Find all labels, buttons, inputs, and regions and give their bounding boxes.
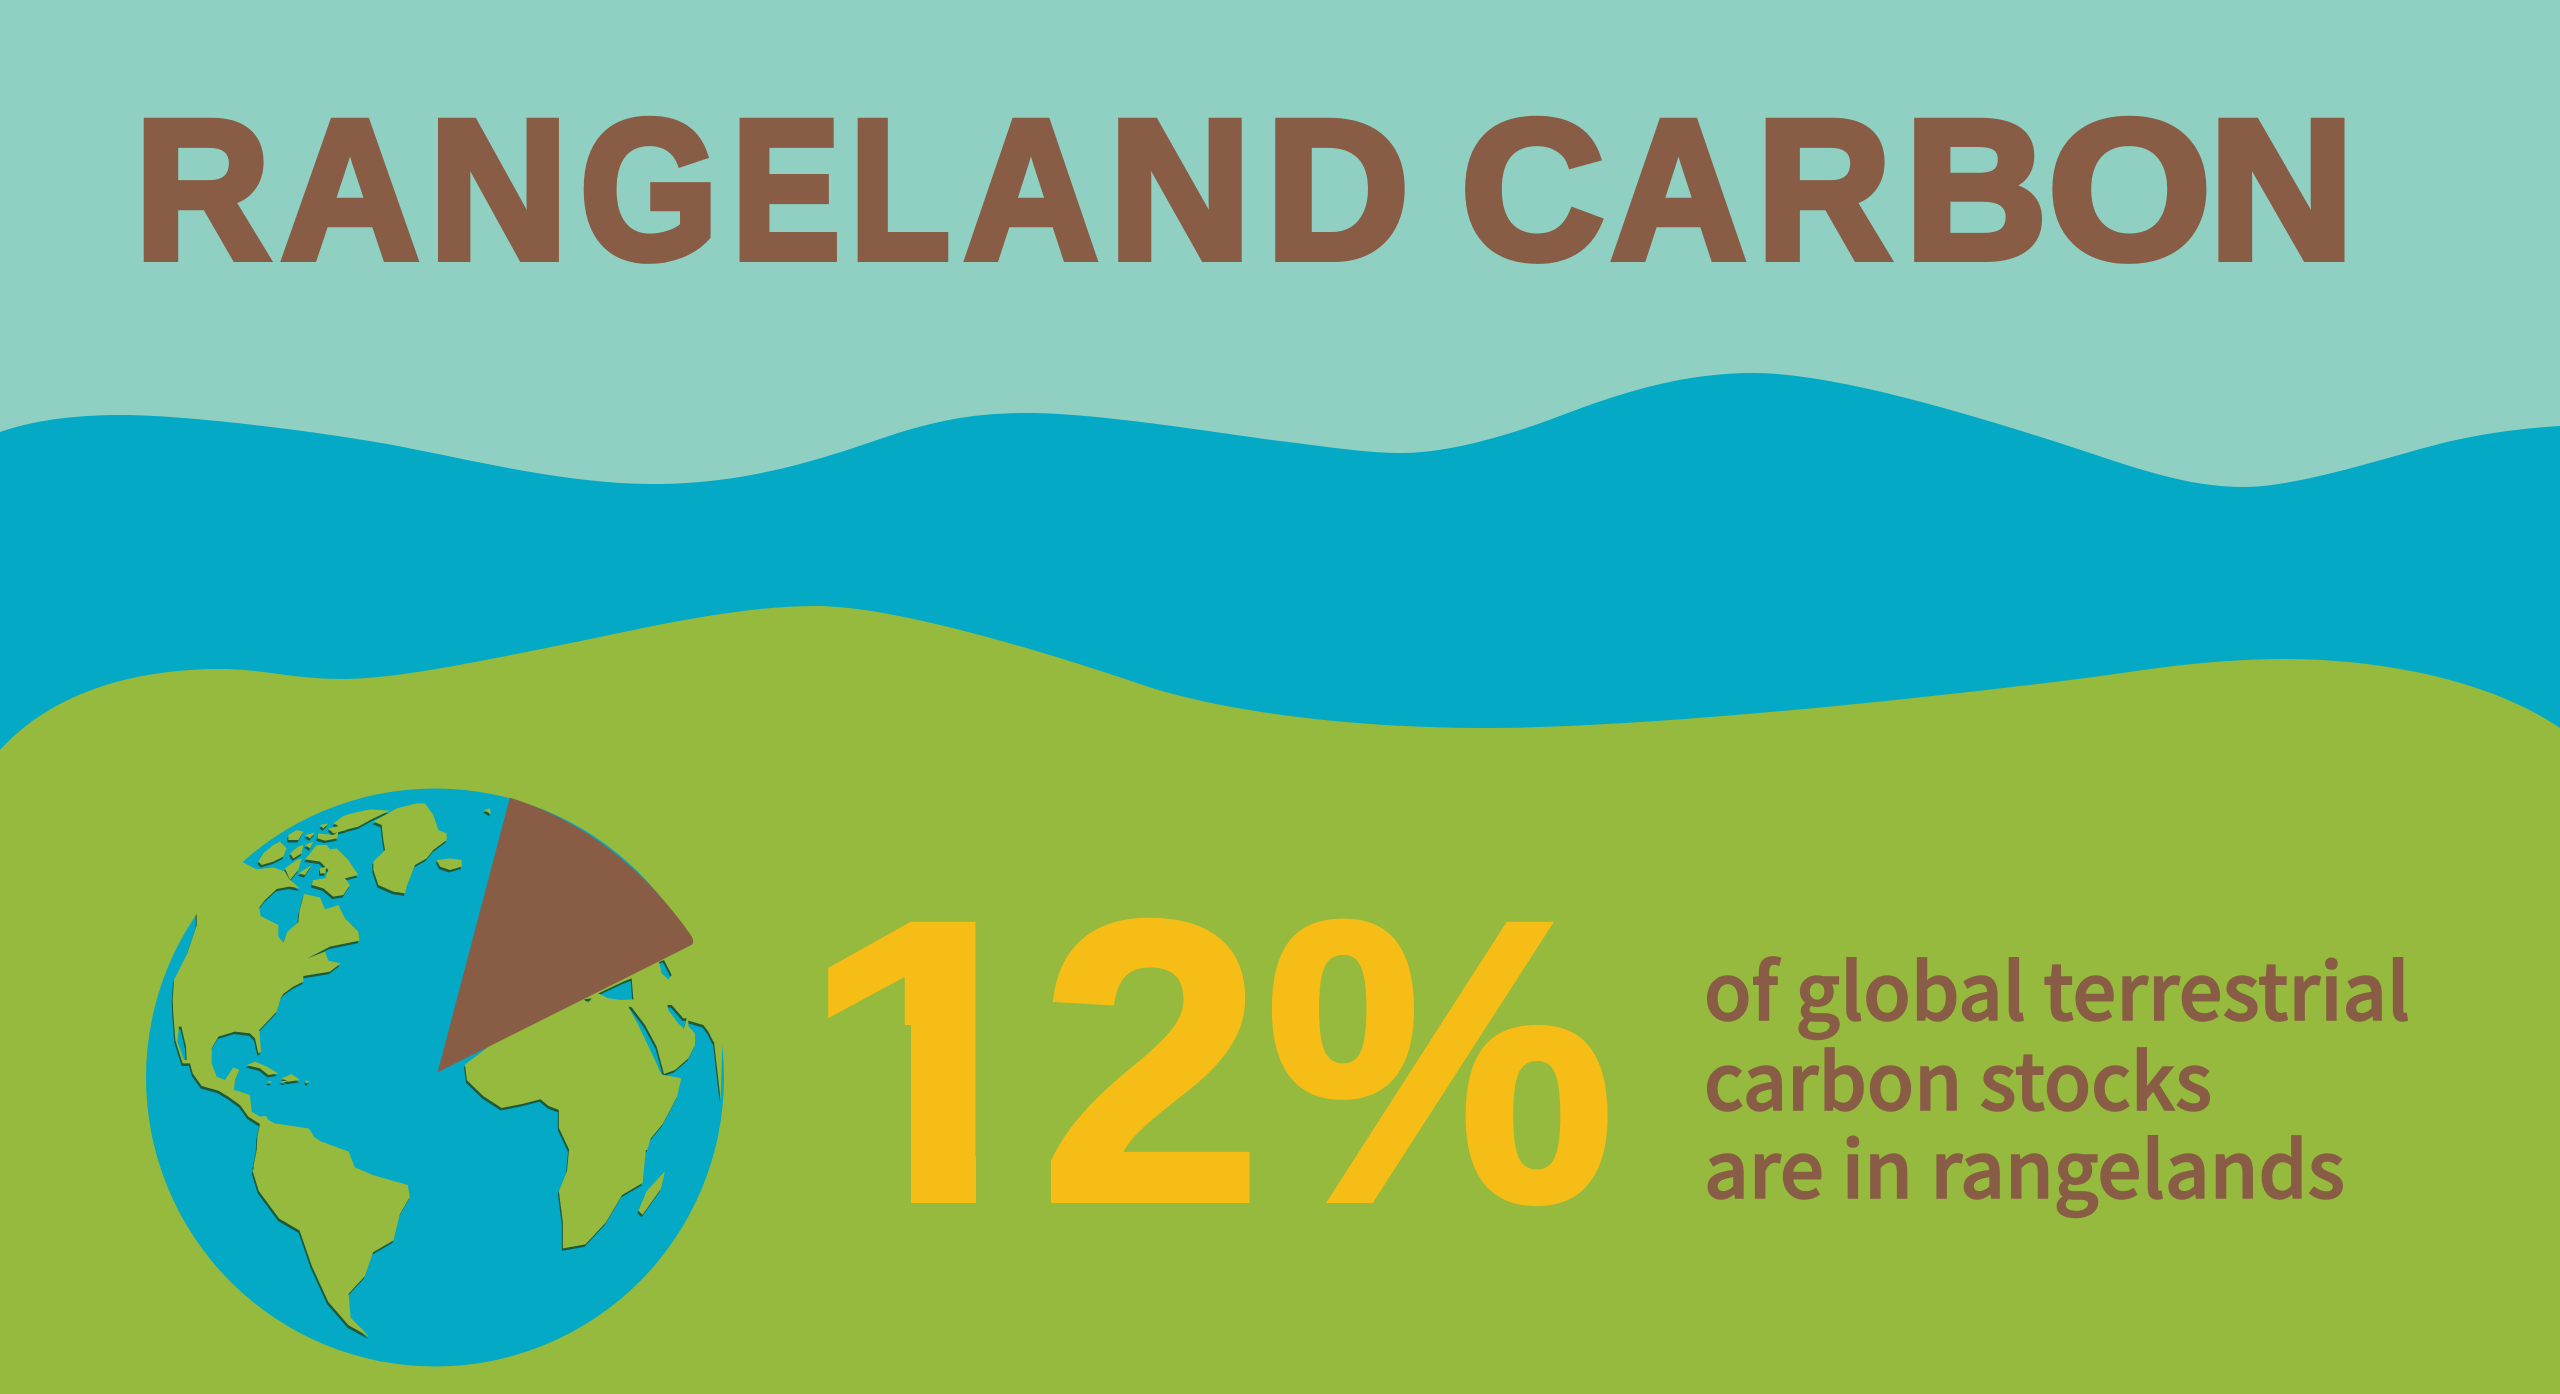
globe ocean: [146, 788, 724, 1366]
title: C: [1461, 79, 1604, 300]
percent sign: %: [1265, 838, 1615, 1285]
title: R: [1757, 79, 1891, 300]
title: A: [1611, 79, 1746, 300]
green land wave: [0, 606, 2560, 1394]
title: O: [2048, 79, 2211, 300]
line 1: of global terrestrial: [1704, 931, 2410, 1043]
title: L: [850, 79, 950, 300]
digit 2: 2: [1040, 838, 1262, 1285]
title: R: [135, 79, 270, 300]
title: A: [964, 79, 1098, 300]
continent shadows: [172, 806, 759, 1339]
title: B: [1905, 79, 2047, 300]
blue water wave band: [0, 373, 2560, 1394]
continents: [173, 803, 760, 1336]
title: N: [1109, 79, 1251, 300]
title: G: [580, 79, 718, 300]
line 2: carbon stocks: [1704, 1021, 2212, 1133]
title: D: [1266, 79, 1409, 300]
pie wedge: 12%: [438, 798, 693, 1072]
line 3: are in rangelands: [1704, 1109, 2345, 1221]
description text: [1704, 931, 2410, 1221]
statistic: 12%: [828, 918, 1608, 1206]
digit 1: 1: [800, 838, 1058, 1285]
title: E: [732, 79, 840, 300]
globe with pie wedge: [146, 788, 760, 1366]
title: N: [429, 79, 568, 300]
title: A: [281, 79, 419, 300]
title: N: [2209, 79, 2354, 300]
